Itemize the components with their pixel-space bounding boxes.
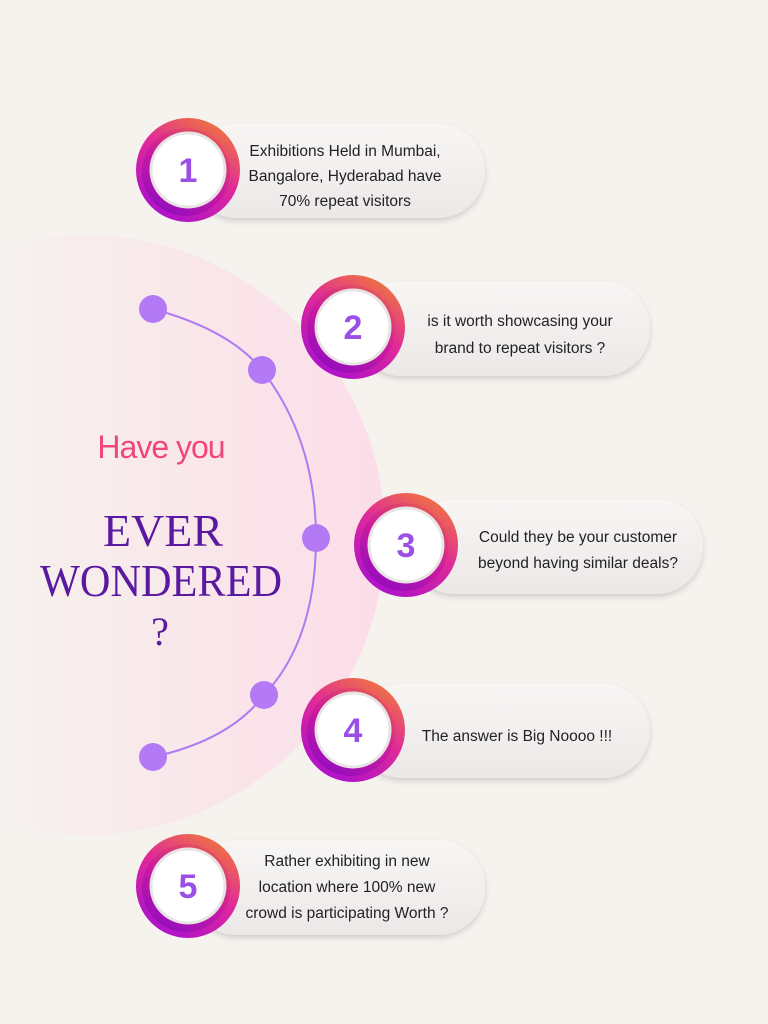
item 5: crowd is participating Worth ? (245, 905, 449, 922)
item 1: 70% repeat visitors (279, 193, 411, 210)
item 5: 5 (179, 868, 197, 906)
heading: Have you ever wondered: Have you (97, 429, 225, 465)
item 2: is it worth showcasing your (427, 313, 613, 330)
item 5 (136, 834, 485, 938)
item 4 (301, 678, 650, 782)
item 1: Bangalore, Hyderabad have (248, 168, 442, 185)
item 4: 4 (344, 712, 363, 750)
item 2: 2 (344, 309, 362, 347)
heading: Have you ever wondered: WONDERED (40, 555, 282, 606)
item 1: 1 (179, 152, 197, 190)
item 2: brand to repeat visitors ? (435, 340, 606, 357)
item 2 (301, 275, 650, 379)
item 1 (136, 118, 485, 222)
item 5: Rather exhibiting in new (264, 853, 431, 870)
heading: Have you ever wondered: EVER (103, 505, 223, 556)
background pink semicircle (0, 235, 385, 835)
item 3: 3 (397, 527, 415, 565)
item 3 (354, 493, 703, 597)
timeline arc (139, 295, 330, 771)
item 1: Exhibitions Held in Mumbai, (249, 143, 441, 160)
item 3: beyond having similar deals? (478, 555, 678, 572)
item 3: Could they be your customer (479, 529, 677, 546)
heading: Have you ever wondered: ? (151, 609, 169, 654)
item 5: location where 100% new (259, 879, 436, 896)
heading: Have you ever wondered (40, 429, 282, 654)
item 4: The answer is Big Noooo !!! (422, 728, 612, 745)
